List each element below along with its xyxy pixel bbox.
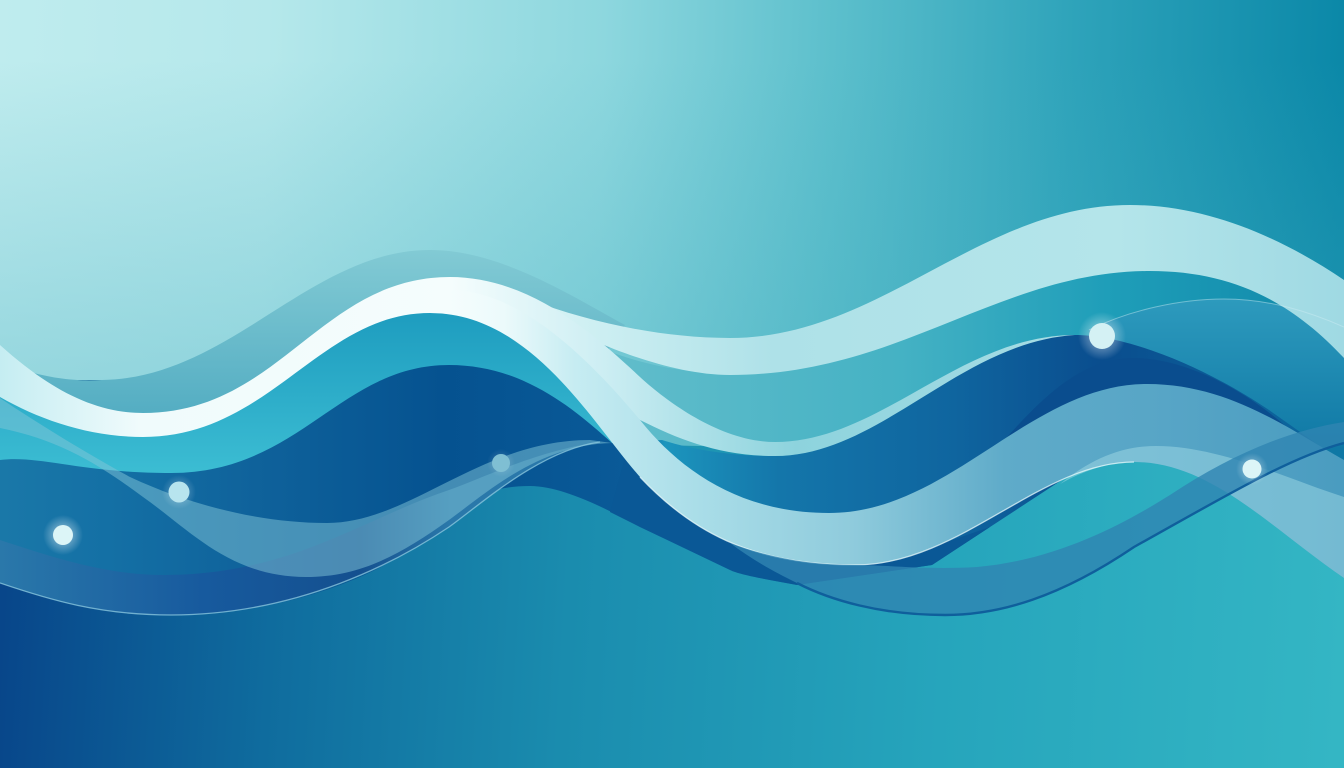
wave: right teal body [560, 271, 1344, 448]
glowing dot 3 [487, 449, 515, 477]
wave: right blue panel [1089, 299, 1344, 480]
ribbon: upper right band [530, 205, 1344, 375]
glowing dot 5 [1236, 453, 1268, 485]
glowing dot 1 [43, 515, 83, 555]
glowing dot 4 [1078, 312, 1126, 360]
glowing dot 2 [162, 475, 196, 509]
ribbon: lower left dark ribbon [0, 442, 600, 615]
ribbon: large light ribbon [430, 290, 1344, 578]
ribbon inner lighter layer [1060, 446, 1344, 578]
ribbon: lower right translucent ribbon [730, 422, 1344, 615]
wave: left teal body [0, 295, 640, 490]
panel edge line [1089, 299, 1344, 330]
faint back wave [30, 250, 625, 420]
wave: dark navy body [0, 335, 1344, 615]
ribbon outline: lower right edge [797, 443, 1344, 615]
ribbon outline: lower left edge [0, 442, 600, 615]
navy deep shadow right [1000, 358, 1290, 445]
ribbon: left translucent ribbon [0, 398, 612, 577]
ribbon bright edge [640, 462, 1134, 565]
navy shadow under large ribbon [610, 440, 990, 585]
ribbon: white ribbon [0, 277, 1075, 456]
